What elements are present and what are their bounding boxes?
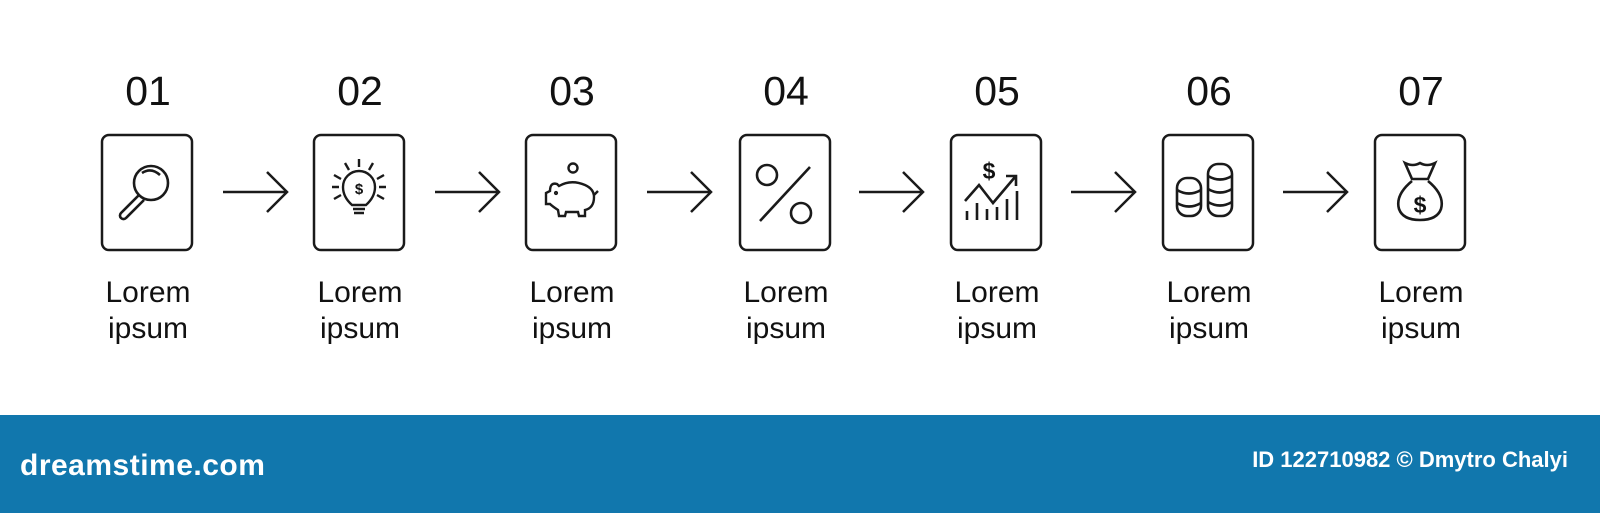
step 05: [951, 68, 1041, 345]
arrow 1: [223, 172, 287, 212]
step 05: $: [983, 158, 996, 184]
step 04: ipsum: [746, 312, 826, 345]
step 01: ipsum: [108, 312, 188, 345]
step 06: Lorem: [1166, 276, 1252, 309]
step 04: Lorem: [743, 276, 829, 309]
step 04: [740, 68, 830, 345]
step 03: ipsum: [532, 312, 612, 345]
step 07: Lorem: [1378, 276, 1464, 309]
footer logo: dreamstime.com: [20, 449, 265, 482]
step 05: ipsum: [957, 312, 1037, 345]
step 07: ipsum: [1381, 312, 1461, 345]
step 02: ipsum: [320, 312, 400, 345]
step 02: Lorem: [317, 276, 403, 309]
step 07: [1375, 68, 1465, 345]
arrow 6: [1283, 172, 1347, 212]
step 04: 04: [763, 68, 809, 114]
arrow 5: [1071, 172, 1135, 212]
arrow 3: [647, 172, 711, 212]
step 05: Lorem: [954, 276, 1040, 309]
step 01: 01: [125, 68, 171, 114]
arrow 4: [859, 172, 923, 212]
icon: lightbulb dollar: [332, 159, 386, 213]
icon: percent: [757, 165, 811, 223]
icon: magnifier: [120, 166, 168, 219]
step 06: 06: [1186, 68, 1232, 114]
icon: money bag: [1398, 163, 1442, 220]
step 06: ipsum: [1169, 312, 1249, 345]
icon: growth chart: [965, 176, 1017, 220]
step 07: $: [1414, 192, 1427, 218]
step 02: $: [355, 181, 364, 198]
step 03: Lorem: [529, 276, 615, 309]
footer credit: ID 122710982 © Dmytro Chalyi: [1252, 447, 1568, 472]
step 05: 05: [974, 68, 1020, 114]
step 02: 02: [337, 68, 383, 114]
step 02: [314, 68, 404, 345]
step 01: Lorem: [105, 276, 191, 309]
footer bar: [0, 415, 1600, 513]
step 07: 07: [1398, 68, 1444, 114]
icon: coin stacks: [1177, 164, 1232, 216]
icon: piggy bank: [546, 164, 598, 216]
step 03: 03: [549, 68, 595, 114]
step 06: [1163, 68, 1253, 345]
step 03: [526, 68, 616, 345]
arrow 2: [435, 172, 499, 212]
step 01: [102, 68, 192, 345]
